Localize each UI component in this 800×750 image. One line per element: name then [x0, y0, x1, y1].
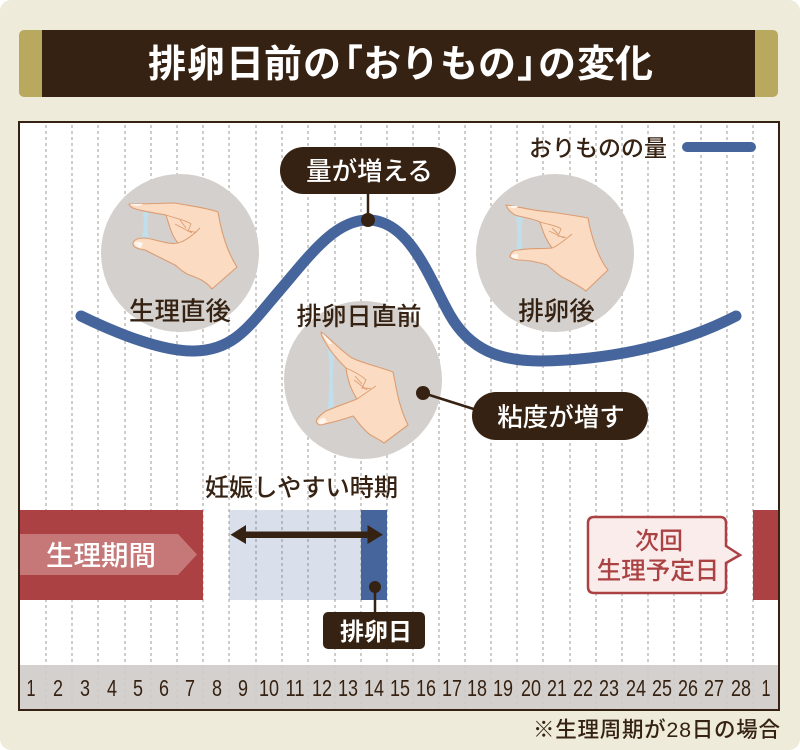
axis: day numbers: 27 [704, 675, 724, 701]
axis: day numbers: 26 [678, 675, 698, 701]
callout: ovulation day [323, 581, 425, 649]
axis: day numbers: 5 [133, 675, 143, 701]
callout: viscosity increases [416, 386, 648, 440]
axis: day numbers: 24 [626, 675, 646, 701]
callout: amount increases: 量が増える [306, 158, 433, 186]
axis: day numbers: 6 [159, 675, 169, 701]
callout: amount increases [280, 147, 456, 227]
panel: just before ovulation hand [284, 301, 442, 459]
axis: day numbers: 22 [573, 675, 593, 701]
axis: day numbers: 17 [442, 675, 462, 701]
bar: ovulation day [361, 510, 387, 600]
label: after ovulation: 排卵後 [518, 298, 595, 326]
bar: fertile period [229, 510, 361, 600]
callout: viscosity increases: 粘度が増す [497, 404, 625, 432]
axis: day numbers: 28 [731, 675, 751, 701]
axis: day numbers: 10 [259, 675, 279, 701]
axis: day numbers: 1 [762, 675, 770, 701]
axis: day numbers: 16 [416, 675, 436, 701]
panel: chart frame [19, 122, 779, 710]
axis: day numbers: 14 [364, 675, 384, 701]
callout: next expected period [588, 517, 740, 593]
callout: next expected period: 生理予定日 [597, 557, 719, 585]
title banner [19, 30, 778, 97]
heading: fertile period: 妊娠しやすい時期 [205, 475, 398, 502]
axis: day numbers: 3 [80, 675, 90, 701]
label: after menstruation: 生理直後 [129, 298, 231, 326]
axis: day numbers: 25 [652, 675, 672, 701]
title banner: 排卵日前の「おりもの」の変化 [148, 44, 653, 86]
axis: day numbers: 11 [286, 675, 304, 701]
axis: day numbers: 8 [212, 675, 222, 701]
axis: day numbers: 1 [26, 675, 36, 701]
bar: menstruation [20, 510, 203, 600]
arrow: fertile period span [230, 525, 383, 544]
axis: day numbers: 4 [107, 675, 117, 701]
axis: day numbers: 21 [547, 675, 567, 701]
axis: day numbers: 15 [390, 675, 410, 701]
panel: after menstruation hand [101, 174, 259, 332]
axis: day numbers: 20 [521, 675, 541, 701]
axis: day numbers: 13 [338, 675, 358, 701]
axis: day numbers: 9 [238, 675, 248, 701]
axis: day numbers: 7 [185, 675, 195, 701]
panel: after ovulation hand [476, 174, 634, 332]
axis: day numbers: 19 [493, 675, 513, 701]
callout: ovulation day: 排卵日 [340, 619, 412, 646]
axis: day numbers: 12 [312, 675, 332, 701]
label: just before ovulation: 排卵日直前 [296, 303, 422, 331]
callout: next expected period: 次回 [635, 528, 683, 555]
footnote: ※生理周期が28日の場合 [533, 718, 780, 742]
discharge amount curve [81, 220, 736, 361]
bar: menstruation: 生理期間 [46, 540, 156, 571]
legend: discharge amount: おりものの量 [529, 135, 667, 161]
bar: next menstruation [753, 510, 778, 600]
axis: day numbers: 18 [467, 675, 487, 701]
axis: day numbers [26, 675, 770, 701]
axis: day numbers: 23 [599, 675, 619, 701]
axis: day numbers: 2 [53, 675, 63, 701]
